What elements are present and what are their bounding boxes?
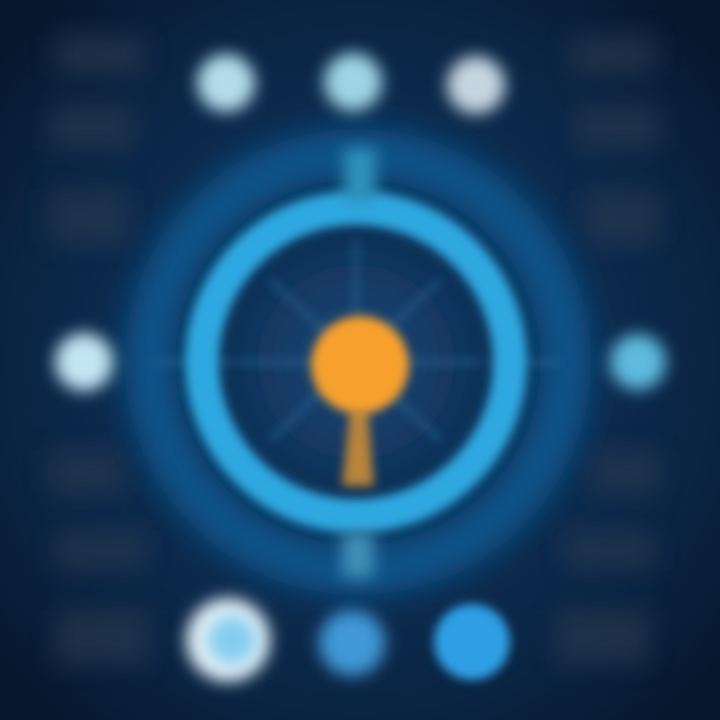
right blurred text blocks [555, 35, 660, 665]
top-left node [197, 54, 255, 112]
orange central circle [311, 316, 409, 414]
outer ring [150, 154, 566, 570]
top-centre node [324, 53, 382, 111]
bottom-left node [186, 598, 270, 682]
bottom connector [342, 532, 374, 578]
top connector [344, 148, 376, 203]
top-right node [447, 56, 505, 114]
inner disc [206, 212, 506, 512]
bottom-centre node [319, 610, 385, 676]
left blurred text blocks [48, 35, 150, 665]
inner ring [202, 208, 510, 516]
bottom-right node [434, 604, 510, 680]
left node [55, 333, 113, 391]
right node [610, 334, 666, 390]
inner grid lines [150, 240, 560, 440]
orange stem [342, 410, 374, 486]
